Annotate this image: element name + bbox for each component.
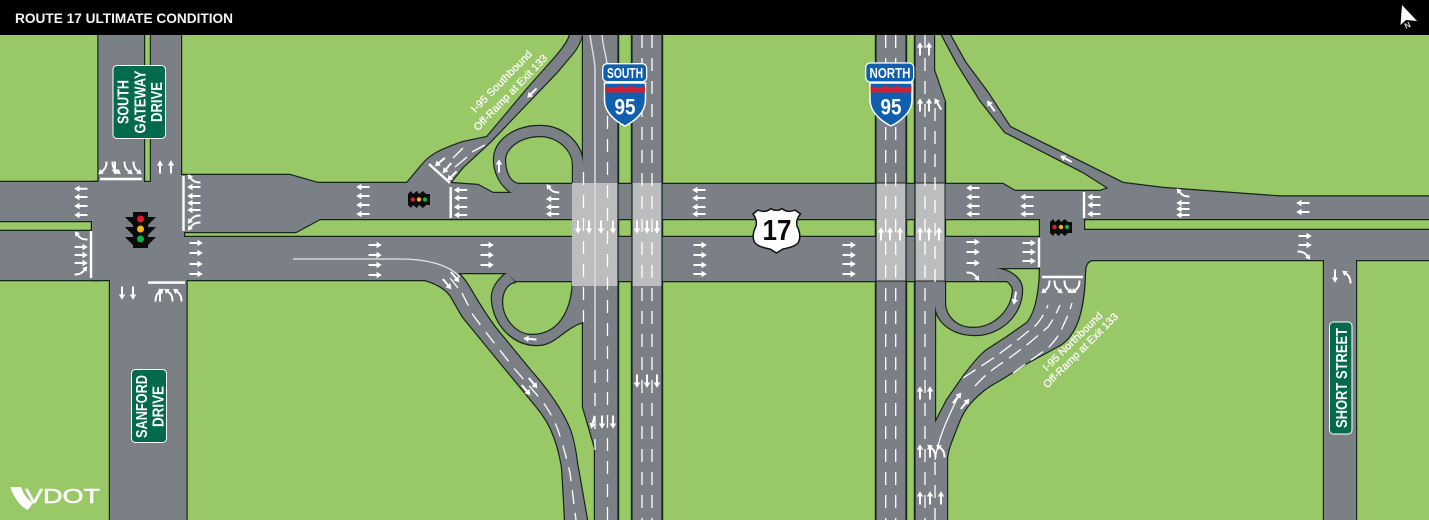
street sign: Short Street: SHORT STREET: [1334, 328, 1351, 428]
lane markings: [293, 35, 1072, 520]
shield: I-95 South: [603, 64, 647, 126]
ramp label: I-95 Northbound: I-95 Northbound: [1041, 310, 1105, 374]
street sign: Sanford Drive: SANFORD: [134, 375, 151, 438]
street sign: South Gateway Drive: [113, 66, 166, 138]
street sign: Sanford Drive: [132, 370, 168, 442]
title bar: [0, 0, 1429, 35]
shield: I-95 South: SOUTH: [607, 66, 643, 82]
lane arrows: I-95 mainline and ramps: [433, 42, 1079, 504]
street sign: South Gateway Drive: DRIVE: [149, 82, 166, 122]
title bar: ROUTE 17 ULTIMATE CONDITION: [15, 11, 233, 26]
traffic signal: ramp east: [1050, 219, 1072, 236]
ramp label: I-95 Southbound: Off-Ramp at Exit 133: [471, 52, 550, 133]
ramp label: I-95 Northbound: Off-Ramp at Exit 133: [1041, 311, 1121, 391]
VDOT logo: VDOT: [25, 486, 100, 508]
shield: US 17: [753, 208, 800, 253]
overpass decks: [572, 35, 945, 520]
street sign: Sanford Drive: DRIVE: [150, 386, 167, 427]
icon: north arrow: [1400, 5, 1417, 31]
traffic signal: Sanford Drive: [125, 212, 156, 248]
street sign: South Gateway Drive: SOUTH: [115, 80, 132, 124]
shield: I-95 North: NORTH: [870, 66, 910, 82]
lane arrows: US 17 corridor: [356, 184, 1350, 284]
shield: I-95 North: 95: [880, 94, 902, 120]
VDOT logo: [10, 486, 100, 510]
street sign: South Gateway Drive: GATEWAY: [132, 70, 149, 134]
street sign: Short Street: [1330, 322, 1352, 434]
shield: I-95 North: [866, 63, 914, 126]
ramp label: I-95 Southbound: I-95 Southbound: [469, 48, 535, 115]
lane arrows: west intersection: [74, 160, 203, 302]
shield: I-95 South: 95: [614, 94, 636, 120]
icon: north arrow: N: [1403, 20, 1412, 31]
traffic signal: ramp west: [408, 191, 430, 208]
stop bars: [91, 164, 1084, 283]
shield: US 17: 17: [762, 215, 792, 247]
